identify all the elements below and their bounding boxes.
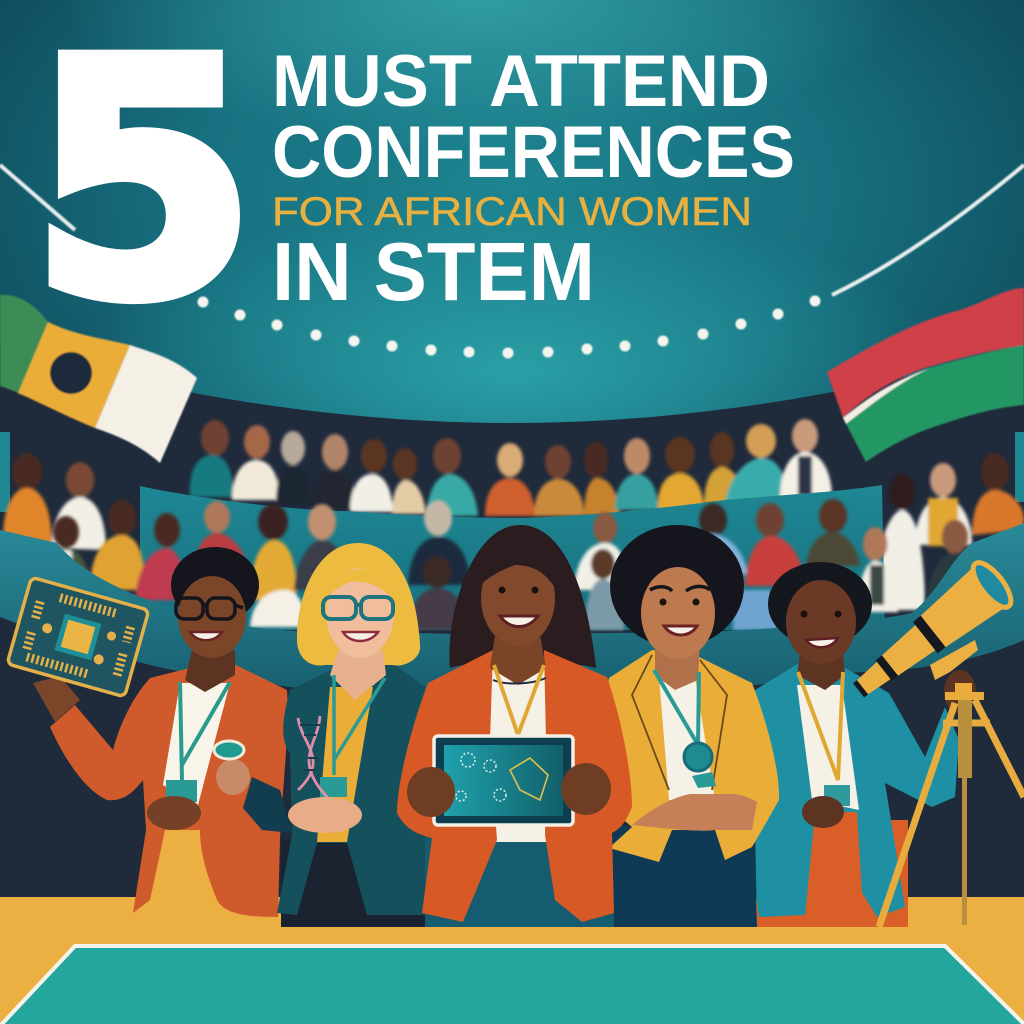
yellow shirt bbox=[317, 687, 373, 842]
badge bbox=[320, 777, 347, 797]
title line: conferences: CONFERENCES bbox=[272, 112, 795, 193]
blond hair bbox=[297, 543, 420, 666]
woman 2: dark teal blazer bbox=[243, 543, 430, 927]
lanyard bbox=[494, 665, 544, 735]
blazer bbox=[277, 663, 430, 915]
collar line bbox=[493, 678, 546, 684]
face bbox=[786, 580, 856, 664]
white shirt bbox=[797, 685, 859, 810]
face bbox=[178, 576, 246, 658]
face bbox=[326, 568, 394, 658]
hand bbox=[288, 797, 362, 833]
woman 5: teal blazer bbox=[749, 562, 976, 927]
face bbox=[641, 567, 715, 659]
woman 1: orange blazer bbox=[33, 547, 288, 917]
chip board held up bbox=[7, 577, 149, 697]
hands bbox=[407, 763, 611, 817]
seating tier: middle bbox=[140, 485, 885, 630]
eyes and smile bbox=[498, 586, 538, 626]
navy trousers bbox=[611, 825, 757, 927]
floor bbox=[0, 897, 1024, 1024]
string lights bbox=[0, 165, 1024, 358]
flag: left bbox=[0, 295, 197, 463]
telescope tube bbox=[842, 557, 1017, 712]
audience: back row bbox=[190, 419, 832, 516]
title line: must attend: MUST ATTEND bbox=[272, 41, 770, 122]
hair fringe bbox=[324, 569, 397, 605]
circuit pads bbox=[25, 593, 133, 682]
glasses bbox=[176, 598, 243, 619]
DNA helix bbox=[298, 716, 328, 798]
forearms and hands bbox=[632, 794, 757, 831]
black skirt bbox=[281, 840, 425, 927]
hair bbox=[449, 525, 596, 668]
chip core bbox=[55, 614, 101, 660]
flag: right bbox=[827, 288, 1024, 462]
smile bbox=[190, 632, 222, 640]
tripod pin bbox=[962, 775, 967, 925]
neck bbox=[490, 635, 546, 685]
neck bbox=[797, 640, 845, 690]
lapel lines bbox=[632, 655, 727, 790]
blazer bbox=[603, 650, 779, 862]
lanyard bbox=[180, 682, 230, 780]
eyes and smile bbox=[800, 610, 842, 647]
afro hair bbox=[610, 525, 744, 647]
title line: in stem: IN STEM bbox=[272, 225, 595, 318]
tablet sketches bbox=[456, 753, 506, 801]
hair bbox=[768, 562, 872, 646]
lanyard bbox=[654, 670, 699, 745]
audience: middle row bbox=[38, 499, 860, 630]
curved teal banner bbox=[0, 0, 1024, 423]
magnifier pendant bbox=[684, 743, 712, 771]
orange skirt panel bbox=[805, 812, 877, 917]
inner chip bbox=[61, 620, 95, 654]
round contacts bbox=[37, 613, 117, 667]
lanyard bbox=[334, 675, 385, 775]
hair fringe bbox=[480, 547, 556, 590]
badge bbox=[166, 780, 197, 802]
white shirt bbox=[490, 670, 546, 842]
skirt bbox=[757, 820, 908, 927]
big numeral 5: 5 bbox=[30, 0, 256, 370]
title line: for african women: FOR AFRICAN WOMEN bbox=[272, 190, 752, 234]
blazer bbox=[50, 665, 288, 917]
stage mat bbox=[0, 946, 1024, 1024]
telescope mount bbox=[930, 640, 978, 680]
audience: side rows bbox=[3, 453, 1024, 610]
hand on telescope bbox=[944, 670, 976, 714]
telescope with tripod bbox=[842, 557, 1024, 927]
hair bbox=[171, 547, 259, 623]
seating tier: front bbox=[0, 523, 1024, 695]
tablet diagram bbox=[510, 758, 548, 800]
woman 4: yellow blazer bbox=[603, 525, 779, 927]
lanyard bbox=[798, 672, 843, 780]
face bbox=[481, 550, 555, 646]
seating tier: side panels bbox=[0, 432, 1024, 512]
woman 1 side cuff bbox=[243, 777, 292, 833]
hand bbox=[802, 796, 844, 828]
smile bbox=[343, 632, 378, 641]
neck bbox=[330, 650, 386, 700]
hand with device bbox=[216, 759, 250, 795]
badge bbox=[824, 785, 850, 806]
neck bbox=[655, 640, 700, 690]
pendant handle bbox=[692, 772, 716, 788]
title bbox=[30, 0, 795, 370]
teal trousers bbox=[425, 835, 614, 927]
tripod column bbox=[958, 698, 972, 778]
yellow skirt bbox=[145, 825, 232, 917]
white shirt bbox=[659, 677, 715, 800]
tablet screen bbox=[444, 745, 563, 816]
glasses bbox=[323, 597, 393, 619]
woman 3: centre orange blazer bbox=[397, 525, 632, 927]
small device bbox=[214, 741, 244, 759]
tripod head bbox=[945, 683, 984, 700]
tripod legs bbox=[879, 700, 1024, 927]
blazer bbox=[749, 663, 959, 917]
hand holding badge bbox=[147, 796, 201, 830]
brows, eyes and smile bbox=[650, 586, 710, 635]
board bbox=[7, 577, 149, 697]
tablet bbox=[434, 736, 573, 825]
white shirt bbox=[163, 683, 230, 805]
neck bbox=[185, 650, 235, 692]
audience: right near row bbox=[858, 520, 982, 612]
raised hand bbox=[33, 676, 80, 722]
blazer bbox=[397, 650, 632, 922]
